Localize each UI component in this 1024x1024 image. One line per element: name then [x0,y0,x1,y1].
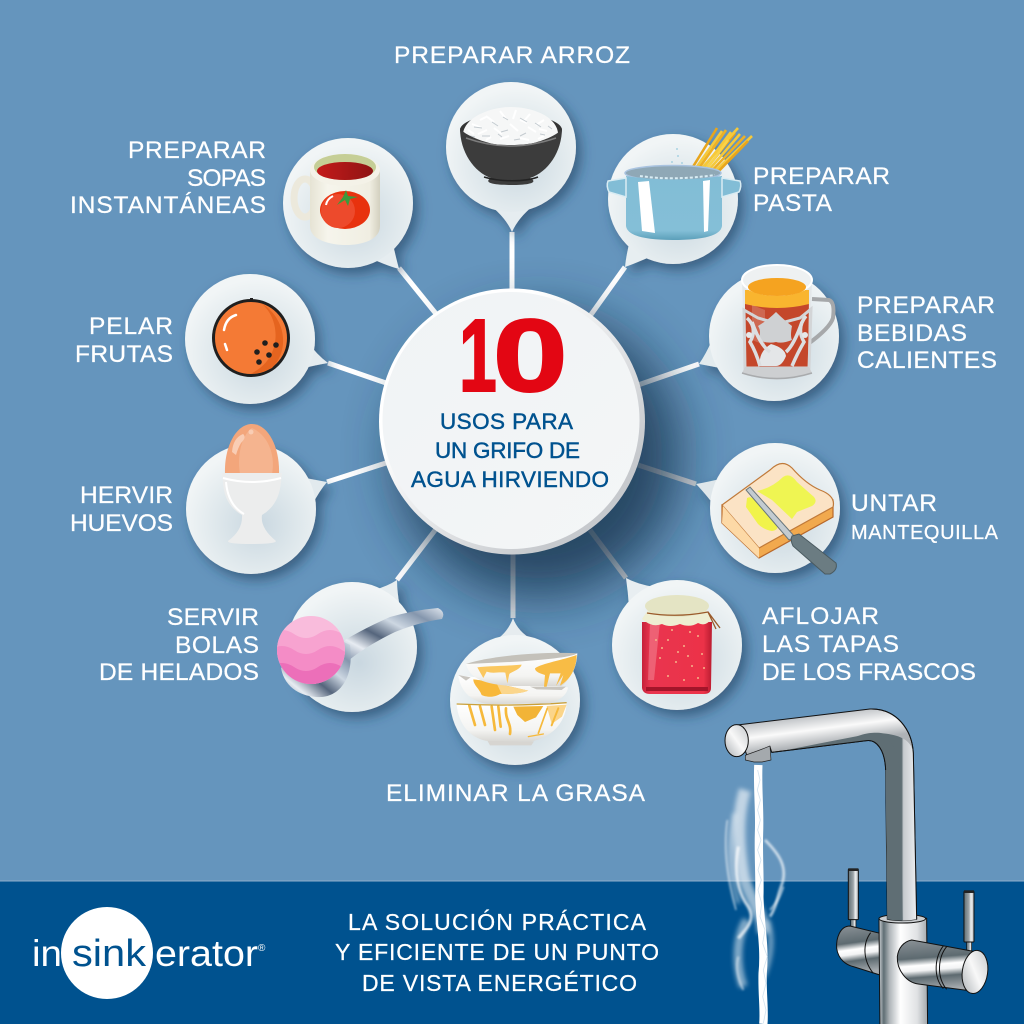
icon: greasy bowls [457,653,577,745]
label: servir helados: BOLAS [175,632,259,659]
icon: faucet [725,709,991,1024]
bubble: rice [446,82,576,232]
icon: toast with butter and knife [722,463,836,574]
icon: boiled egg in cup [222,424,282,544]
logo: insinkerator: in [32,933,62,974]
icon: orange [214,298,288,376]
logo: insinkerator: ® [258,943,266,954]
label: bebidas calientes: BEBIDAS [857,320,967,347]
aerator [745,746,771,762]
logo: insinkerator: sink [72,933,147,975]
label: untar mantequilla [851,490,999,544]
bubble: soup [283,138,413,269]
label: preparar arroz: PREPARAR ARROZ [394,42,630,69]
center heading: AGUA HIRVIENDO [411,467,609,492]
label: bebidas calientes: CALIENTES [857,347,997,374]
footer tagline: Y EFICIENTE DE UN PUNTO [335,939,659,965]
icon: water stream and steam [726,765,784,1024]
spout [737,709,917,921]
label: servir helados: DE HELADOS [99,659,259,686]
center circle shadow [396,313,680,597]
footer band [0,880,1024,1024]
icon: pot with pasta [607,128,752,240]
bubble: ice cream [270,580,443,712]
bubble: jam [612,578,742,710]
label: aflojar tapas: AFLOJAR [762,603,879,630]
bubble: tea [699,265,839,401]
icon: jam jar [642,595,720,694]
label: pelar frutas: PELAR [89,313,173,340]
icon: ice cream scoop [270,608,443,700]
bubble: pasta [607,128,752,267]
label: preparar sopas [70,137,266,219]
label: untar mantequilla: UNTAR [851,490,937,517]
center heading: USOS PARA [440,409,573,434]
left handle [848,868,858,930]
bubble: orange [185,274,328,404]
center heading [411,409,609,492]
label: preparar pasta [753,163,890,217]
label: preparar sopas: INSTANTÁNEAS [70,192,266,219]
label: bebidas calientes [857,292,997,374]
logo: insinkerator [32,907,266,999]
label: preparar sopas: PREPARAR [128,137,266,164]
right knob [897,940,977,992]
label: pelar frutas: FRUTAS [75,341,173,368]
right handle [964,890,974,952]
label: preparar sopas: SOPAS [187,165,266,192]
column [879,918,928,1024]
label: eliminar la grasa: ELIMINAR LA GRASA [386,780,646,807]
bubble: egg [186,424,327,574]
icon: tea glass [742,265,834,380]
label: pelar frutas [75,313,173,368]
bubble: butter [696,443,840,574]
label: aflojar tapas: LAS TAPAS [762,631,899,658]
logo: insinkerator: erator [155,933,258,974]
left knob [837,926,880,975]
big number 10 [459,299,567,413]
icon: rice bowl [460,107,562,185]
footer tagline: DE VISTA ENERGÉTICO [362,970,637,996]
label: preparar pasta: PREPARAR [753,163,890,190]
label: servir helados: SERVIR [167,604,259,631]
icon: tomato soup mug [294,154,380,245]
big number 10: 1 [459,299,497,413]
center heading: UN GRIFO DE [435,438,580,463]
label: preparar pasta: PASTA [753,190,833,217]
connector lines [327,232,699,618]
silver lace holder [744,309,811,368]
footer tagline: LA SOLUCIÓN PRÁCTICA [348,909,647,935]
footer tagline [335,909,659,996]
label: hervir huevos [70,482,173,537]
label: untar mantequilla: MANTEQUILLA [851,522,999,544]
label: servir helados [99,604,259,686]
label: hervir huevos: HERVIR [80,482,173,509]
label: aflojar tapas [762,603,976,686]
bubble: dishes [450,618,580,765]
big number 10: 0 [493,299,567,413]
label: bebidas calientes: PREPARAR [857,292,995,319]
label: hervir huevos: HUEVOS [70,510,173,537]
center circle: 10 usos [379,288,645,554]
label: aflojar tapas: DE LOS FRASCOS [762,659,976,686]
